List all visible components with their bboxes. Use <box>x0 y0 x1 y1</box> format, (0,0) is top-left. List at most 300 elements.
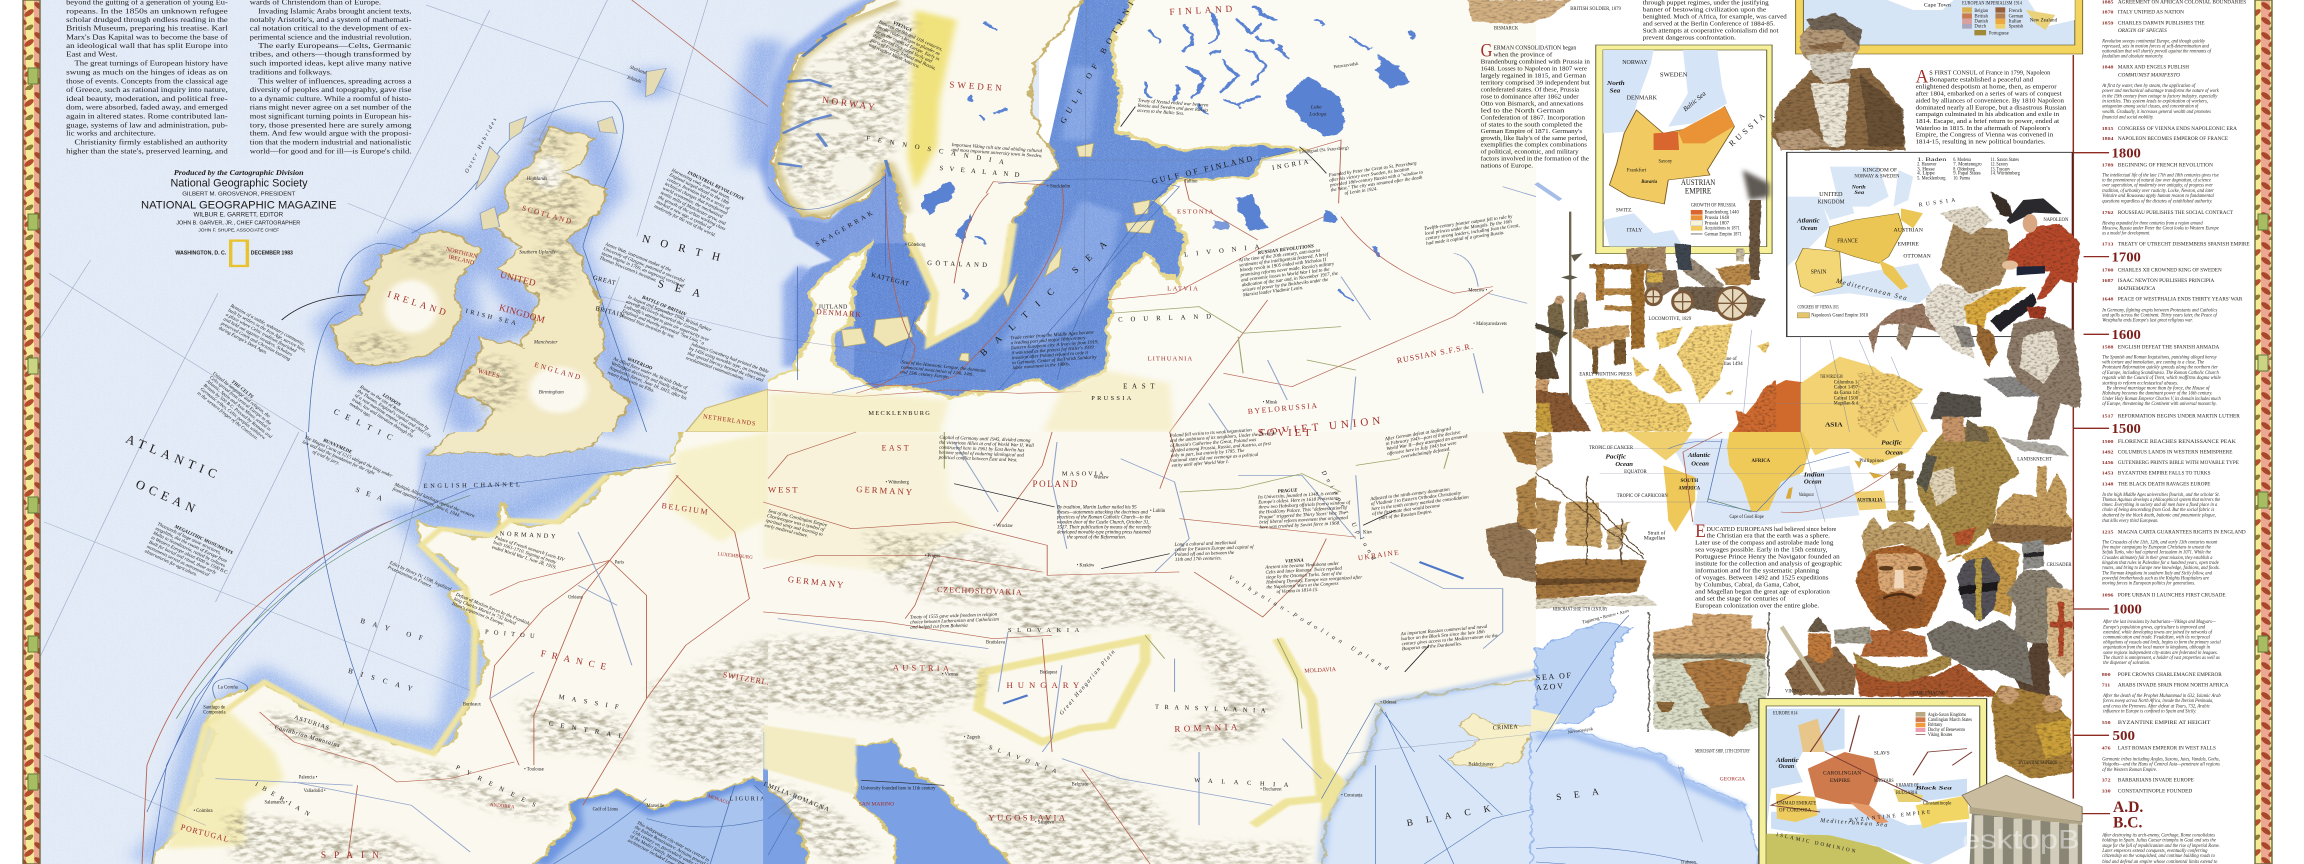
callouts in Atlantic and France: RUNNYMEDE <box>322 438 353 456</box>
callouts in central and eastern Europe: here was crushed by Soviet force in 1968. <box>1259 521 1340 531</box>
text column 1: East and West. <box>66 50 118 59</box>
text column 1: of Greece, such as rational inquiry into nature, <box>66 86 228 94</box>
timeline medieval entries: THE BLACK DEATH RAVAGES EUROPE <box>2118 481 2210 487</box>
prussia inset labels: SWEDEN <box>1660 71 1688 78</box>
callouts in central and eastern Europe: century gives access to the Mediterranean via the <box>1401 634 1499 647</box>
europe 814 labels and legend: Viking Routes <box>1928 733 1953 738</box>
callouts in Atlantic and France: observatories for agriculture. <box>144 549 198 578</box>
timeline late antique entries: Visigoths—and the Huns of Central Asia—penetrate all regions <box>2102 762 2220 767</box>
visored knight <box>1927 557 2033 687</box>
callouts in British Isles seas: Napoleon's forces, June 18, 1815, after his <box>607 366 687 402</box>
timeline early medieval entries: BYZANTINE EMPIRE AT HEIGHT <box>2118 719 2211 726</box>
map labels central and eastern Europe: • Lublin <box>1150 509 1166 514</box>
callouts in British Isles seas: Germanic tribes, Celtic peoples withdrew <box>199 387 266 442</box>
map labels France and Iberia: Cantabrian Mountains <box>274 725 341 749</box>
vienna inset labels: Ocean <box>1800 224 1818 232</box>
text column 2: to a dynamic culture. While a roomful of histo- <box>250 95 411 103</box>
Norwegian fjords <box>778 23 890 177</box>
vienna inset labels: 13. Tuscany <box>1991 167 2010 172</box>
text column 1: The great turnings of European history have <box>74 59 228 68</box>
callouts in Scandinavia and Baltic: and reached North America. <box>868 43 920 70</box>
callouts in Scandinavia and Baltic: invasion after Poland refused to cede it <box>1012 351 1089 361</box>
world map 1500 upper: Europe and Asia: Cabot 1497 <box>1834 385 1858 390</box>
printing press and table <box>1536 264 1648 373</box>
callouts in central and eastern Europe: center for Eastern Europe and capital of <box>1175 545 1254 553</box>
map labels central and eastern Europe: Great Hungarian Plain <box>1059 648 1117 717</box>
timeline entries 17th century: 1700 <box>2102 269 2114 273</box>
map labels central and eastern Europe: • Zagreb <box>964 736 981 741</box>
callouts in British Isles seas: United by language and religion, the <box>211 372 271 420</box>
Dobruja yellow coast <box>1321 759 1346 822</box>
map labels central and eastern Europe: • Odessa <box>1380 701 1396 706</box>
Netherlands coast <box>686 389 768 432</box>
europe 814 labels and legend: Black Sea <box>1914 785 1952 791</box>
map labels central and eastern Europe: SAN MARINO <box>859 801 894 807</box>
callouts in British Isles seas: by 1456 using movable type, an invention <box>688 347 766 379</box>
Crimea <box>1449 715 1542 767</box>
vienna inset labels: Atlantic <box>1796 217 1820 224</box>
imperial legend swatches: Spanish <box>2009 24 2023 29</box>
text column 2: tory, those presented here are surely among <box>250 121 412 130</box>
imperial legend swatches: Belgian <box>1974 9 1988 14</box>
timeline upper entries: COMMUNIST MANIFESTO <box>2118 72 2180 78</box>
vienna inset seas <box>1788 167 1933 303</box>
callouts in Atlantic and France: in Western Europe about 4500 to 1500 B.C. <box>150 536 229 576</box>
quadrant: Atlantic, France and Iberia <box>39 419 803 864</box>
map labels Scandinavia: FENNOSCANDIA <box>866 135 1012 168</box>
timeline marker 1600 <box>2084 326 2141 342</box>
timeline early medieval entries <box>2102 619 2229 726</box>
timeline early medieval entries: and cross the Pyrenees. After defeat at Tours, 732, Arabic <box>2103 703 2210 709</box>
text block: Age of exploration: DUCATED EUROPEANS had believed since before <box>1706 525 1836 533</box>
Sea speckle <box>768 0 1258 400</box>
text column 1: ideal beauty, moderation, and political free- <box>66 95 228 103</box>
map labels British Isles: Manchester <box>533 340 557 345</box>
wheel spokes <box>1645 287 1749 319</box>
southern England <box>426 432 603 458</box>
europe 814 labels and legend: Atlantic <box>1775 756 1799 764</box>
coastal yellow tint France and Iberia <box>176 475 607 832</box>
inland white in Ireland and England <box>384 157 588 413</box>
callouts in British Isles seas: modern age. <box>348 402 371 419</box>
timeline early medieval entries: 550 <box>2102 722 2111 726</box>
map labels Scandinavia: Tallinn <box>1184 180 1198 185</box>
timeline entries 18th century: Having expanded for three centuries from a region around <box>2101 221 2203 226</box>
europe 814 seas <box>1767 709 1967 864</box>
world map 1500 lower: Pacific <box>1881 439 1902 446</box>
world map 1500 upper: Europe and Asia: EUROPE <box>1746 418 1763 426</box>
callouts in central and eastern Europe: An important Russian commercial and naval <box>1400 625 1488 637</box>
callouts in British Isles seas: return from exile on Elba. <box>606 371 655 394</box>
illustration: Karl Marx <box>1771 13 1906 150</box>
world map 1500 upper: Europe and Asia <box>1585 330 1928 432</box>
callouts in central and eastern Europe: only in part, but entirely by 1795. The <box>1171 449 1245 459</box>
map labels central and eastern Europe: ROMANIA <box>1174 722 1241 734</box>
timeline late antique entries: LAST ROMAN EMPEROR IN WEST FALLS <box>2118 745 2216 751</box>
callouts in central and eastern Europe: wooden door of the Castle Church, October 31, <box>1057 521 1149 526</box>
map labels France and Iberia: NORMANDY <box>499 530 558 540</box>
map labels central and eastern Europe: EAST <box>882 443 911 452</box>
callouts in British Isles seas: century. Invention led to a series of <box>666 177 730 212</box>
imperial legend swatches <box>1962 7 2023 36</box>
timeline entries 16th century <box>2101 344 2240 419</box>
map labels British Isles: WALES <box>477 368 501 380</box>
callouts in central and eastern Europe: theses—statements attacking the doctrines and <box>1057 511 1148 516</box>
text block: Age of exploration: institute for the collection and analysis of geographic <box>1695 560 1842 567</box>
callouts in Scandinavia and Baltic: and most important university town in Sweden. <box>951 148 1043 159</box>
callouts in British Isles seas: built by settlers in the Iron Age, survive here, <box>227 308 307 354</box>
timeline medieval entries: 1492 <box>2102 451 2114 455</box>
map labels central and eastern Europe: • Wrocław <box>993 524 1014 529</box>
callouts in Scandinavia and Baltic: At the time of the 20th century, anti-tsarist <box>1237 249 1321 264</box>
timeline medieval entries: FLORENCE REACHES RENAISSANCE PEAK <box>2118 438 2237 445</box>
europe 814 labels and legend: BYZANTINE EMPIRE <box>1849 809 1933 824</box>
mainland, Finland and Russia land <box>748 0 1571 447</box>
callouts in British Isles seas: Luftwaffe's attempt to gain air superiority over <box>622 304 710 343</box>
europe 814 labels and legend: Brittany <box>1928 723 1943 728</box>
vienna inset labels: 11. Saxon States <box>1991 158 2019 163</box>
text block: Age of exploration: information and for the systematic planning <box>1695 567 1820 574</box>
vienna inset labels: 3. Hesse <box>1917 167 1935 172</box>
map labels France and Iberia: Valladolid • <box>304 789 326 794</box>
text column 2: diversity of peoples and topography, gave rise <box>250 86 411 94</box>
prussia inset seas <box>1603 50 1727 247</box>
prussia inset legend: Prussia 1648 <box>1704 216 1729 221</box>
timeline entries 16th century: with torture and immolation, are coming to a close. The <box>2102 360 2204 365</box>
timeline Roman entry: After destroying its arch-enemy, Carthage, Rome consolidates <box>2101 833 2215 838</box>
timeline entries 17th century: In Germany, fighting erupts between Protestants and Catholics <box>2101 307 2218 313</box>
text block: Africa colonialism: benighted. Much of Africa, for example, was carved <box>1643 13 1787 20</box>
world map 1500 lower: AFRICA <box>1752 457 1771 464</box>
map labels central and eastern Europe: EMILIA-ROMAGNA <box>762 781 831 814</box>
Sea of Azov <box>1536 622 1629 725</box>
callouts in British Isles seas: Atlantic, Spain and Asia Minor, settled in <box>204 379 272 433</box>
text block: Africa colonialism: and served at the Berlin Conference of 1884-85. <box>1643 20 1775 27</box>
islands <box>475 68 666 230</box>
callouts in central and eastern Europe: brief liberal reform movement that originated <box>1259 516 1349 526</box>
callouts in central and eastern Europe: World War II—they attempted an armored <box>1386 434 1468 452</box>
timeline medieval entries: The Norman kingdoms in southern Italy and Sicily follow, and <box>2102 570 2212 576</box>
vienna inset labels: AUSTRIAN <box>1894 227 1923 233</box>
vienna inset Spain <box>1796 248 1842 293</box>
timeline medieval entries: 1500 <box>2102 441 2114 445</box>
europe 814 labels and legend: Constantinople <box>1923 801 1952 806</box>
Asia edge of world map <box>1858 372 1923 438</box>
vienna inset labels: 10. Parma <box>1953 176 1970 181</box>
map labels central and eastern Europe: • Bucharest <box>1260 787 1282 792</box>
timeline entries 17th century: Westphalia ends Europe's last great religious war. <box>2102 318 2193 323</box>
callouts in central and eastern Europe: spiritual unity and learning to <box>765 519 824 538</box>
text block: Age of exploration: sea voyages possible. Early in the 15th century, <box>1695 546 1827 553</box>
Russian river fragment <box>1536 183 1560 200</box>
prussia inset legend <box>1691 203 1742 237</box>
text column 2: Invading Islamic Arabs brought ancient texts, <box>258 7 411 16</box>
map labels Scandinavia: INGRIA <box>1272 158 1312 172</box>
callouts in central and eastern Europe: the Hradčany Palace. This "defenestration of <box>1259 506 1348 516</box>
world map 1500 lower: Madagascar <box>1799 493 1814 498</box>
callouts in British Isles seas: to the western fringes of the Continent. <box>196 391 259 442</box>
English Channel halo <box>416 445 676 520</box>
map routes and grid <box>39 432 768 864</box>
illustration: Roman temple <box>1962 775 2082 864</box>
merchant ship masts at Ukraine edge <box>1486 432 1536 582</box>
map labels central and eastern Europe: GERMANY <box>856 484 914 497</box>
map labels France and Iberia: SEA <box>354 486 390 505</box>
callouts in central and eastern Europe: Prague" triggered the Thirty Years' War. The <box>1258 511 1347 521</box>
timeline medieval entries: chain of being descending from God. But the social fabric is <box>2102 507 2215 513</box>
map labels Scandinavia <box>814 0 1507 440</box>
cross finial and crown <box>1862 463 1942 562</box>
rider hat <box>2007 198 2062 224</box>
map labels Scandinavia: LITHUANIA <box>1148 356 1193 363</box>
timeline early medieval entries: 711 <box>2102 684 2111 688</box>
map labels Scandinavia: EAST <box>1123 382 1159 390</box>
left decorative border <box>23 0 40 864</box>
map labels France and Iberia: MASSIF <box>558 694 626 712</box>
Portugal yellow tint <box>167 699 284 849</box>
soldier portrait fragment: BRITISH SOLDIER, 1879 <box>1570 7 1622 12</box>
timeline entries 16th century: ENGLISH DEFEAT THE SPANISH ARMADA <box>2118 344 2220 350</box>
callouts in central and eastern Europe: Bosporus and the Dardanelles. <box>1402 642 1462 652</box>
map labels Scandinavia: • Stockholm <box>1047 184 1071 189</box>
timeline late antique entries: of the Western Roman Empire. <box>2102 767 2157 773</box>
vienna inset labels: 5. Mecklenburg <box>1917 176 1946 181</box>
text block: German consolidation: confederated states. Of these, Prussia <box>1481 86 1579 93</box>
map labels France and Iberia: FRANCE <box>540 649 613 674</box>
castle on crag <box>1987 437 2073 545</box>
figure captions: VIKING <box>1785 690 1802 695</box>
europe 814 labels and legend: MAGYARS <box>1874 778 1894 784</box>
Black Sea routes and labels <box>1536 609 1746 864</box>
map labels Scandinavia: JUTLAND <box>818 304 848 310</box>
map labels central and eastern Europe: • Sarajevo <box>1035 821 1055 826</box>
map labels France and Iberia: • Coimbra <box>193 809 213 814</box>
timeline marker 500 <box>2073 727 2135 743</box>
prussia inset German Empire <box>1609 107 1734 204</box>
callouts in Scandinavia and Baltic: had made it capital of a growing Russia. <box>1426 231 1505 247</box>
callouts in British Isles seas <box>195 164 770 452</box>
timeline early medieval entries: After the death of the Prophet Muhammad in 632, Islamic Arab <box>2102 693 2221 699</box>
text block: German consolidation: G <box>1481 41 1492 61</box>
map labels central and eastern Europe: SOVIET <box>1258 428 1314 439</box>
timeline upper entries: MARX AND ENGELS PUBLISH <box>2118 64 2189 70</box>
publisher credits: DECEMBER 1983 <box>251 250 293 256</box>
publisher credits <box>141 169 336 256</box>
text block: Age of exploration: E <box>1695 521 1706 542</box>
quadrant: top right illustrations and timeline <box>1467 0 2250 436</box>
text block: Napoleon <box>1916 66 2067 145</box>
text block: German consolidation: largely regained in 1815, and German <box>1481 72 1587 79</box>
text block: Napoleon: after 1804, embarked on a series of wars of conquest <box>1916 90 2062 97</box>
Benelux and eastern France tint <box>666 432 768 542</box>
timeline medieval entries: 1215 <box>2102 531 2114 535</box>
callouts in British Isles seas: trade, law and literature through the <box>351 398 415 440</box>
callouts in Scandinavia and Baltic: the West." The city was renamed after the death <box>1330 176 1423 193</box>
text block: Napoleon: 1814-15, resulting in new political boundaries. <box>1916 138 2045 145</box>
text block: German consolidation: of political, economic, and military <box>1481 148 1579 155</box>
callouts in central and eastern Europe: Seat of the Carolingian Empire <box>768 509 828 529</box>
timeline entries 18th century: questions regardless of the dictates of established authority. <box>2102 198 2212 204</box>
map labels France and Iberia: La Coruña <box>218 686 238 691</box>
timeline early medieval entries: the dispenser of salvation. <box>2103 660 2150 666</box>
text block: Napoleon: Empire, the Congress of Vienna was convened in <box>1916 131 2054 138</box>
timeline Roman entry: holdings in Spain. Julius Caesar triumphs in Gaul and sets the <box>2102 838 2216 843</box>
illustration group: Charlemagne, knights, soldier, Viking (true scale) <box>1782 427 2073 697</box>
timeline medieval entries: kingdom that rules in Palestine for a hundred years, open trade <box>2102 560 2219 566</box>
timeline entries 18th century: Voltaire and Rousseau apply human reason to fundamental <box>2102 193 2214 199</box>
press and locomotive captions: LOCOMOTIVE, 1829 <box>1649 317 1692 322</box>
map labels central and eastern Europe <box>762 428 1519 829</box>
timeline upper entries: 1815 <box>2102 128 2114 132</box>
timeline medieval entries: BYZANTINE EMPIRE FALLS TO TURKS <box>2118 470 2210 476</box>
Ireland <box>333 232 479 364</box>
world map 1500 upper: Europe and Asia: ASIA <box>1825 421 1843 428</box>
map labels France and Iberia: PYRENEES <box>455 764 544 813</box>
callouts in British Isles seas: technical changes that transformed <box>664 182 728 217</box>
text block: German consolidation: Otto von Bismarck, and annexations <box>1481 100 1584 107</box>
europe 814 labels and legend: Ocean <box>1778 762 1794 770</box>
horse forelegs <box>1868 303 1938 354</box>
timeline upper entries: 1804 <box>2102 138 2114 142</box>
map labels France and Iberia: SPAIN <box>321 851 387 861</box>
timeline marker 1600: 1600 <box>2112 326 2141 342</box>
timeline Roman entry: Later emperors extend conquests, eventually conferring <box>2101 848 2208 854</box>
prussia inset labels: Bavaria <box>1641 178 1657 185</box>
Scandinavian peninsula <box>773 0 1091 343</box>
vienna inset labels: KINGDOM OF <box>1863 168 1897 173</box>
world map 1500 upper: Europe and Asia: Columbus 1492-93 <box>1834 380 1871 385</box>
world map 1500 lower: Ocean <box>1691 460 1709 467</box>
map labels central and eastern Europe: Dnieper Upland <box>1319 469 1379 565</box>
world map 1500 lower: Magellan <box>1644 536 1665 541</box>
callouts in British Isles seas: marked a new age, a symbol of <box>655 200 712 231</box>
callouts in British Isles seas: steam engine in 1769, an improved version of <box>600 251 685 290</box>
press and locomotive captions: EARLY PRINTING PRESS <box>1579 372 1632 377</box>
sea speckle <box>39 432 768 864</box>
text column 2: tribes, and others—though transformed by <box>250 50 412 59</box>
vienna inset labels <box>1796 158 2020 318</box>
timeline upper entries: in textiles. This system leads to exploitation of workers, <box>2102 98 2208 104</box>
map labels central and eastern Europe: University founded here in 11th century <box>861 786 936 791</box>
timeline entries 18th century: 1789 <box>2102 164 2114 168</box>
soldier with hat below horse <box>1930 392 1990 442</box>
text block: Age of exploration: European colonization over the entire globe. <box>1695 602 1819 609</box>
Eastern Crimea fragment <box>1531 709 1560 732</box>
map labels British Isles: UNITED <box>499 271 537 289</box>
timeline medieval entries: shattered by the black death, bubonic and pneumonic plague, <box>2102 513 2216 518</box>
callouts in central and eastern Europe: choice between Lutheranism and Catholicism <box>910 618 999 626</box>
timeline marker 1000: 1000 <box>2112 601 2142 617</box>
prussia inset labels: Baltic Sea <box>1682 90 1708 113</box>
timeline late antique entries: 372 <box>2102 779 2111 783</box>
europe 814 labels and legend: SLAVS <box>1874 750 1890 756</box>
callouts in central and eastern Europe: constructed here in 1961 by East Berlin has <box>939 446 1024 454</box>
world map 1500 lower: AMERICA <box>1679 485 1701 491</box>
timeline entries 16th century: 1517 <box>2102 415 2114 419</box>
lower right insets and temple <box>1759 685 2082 864</box>
publisher credits: WASHINGTON, D. C. <box>175 250 226 256</box>
world map 1500 upper: Europe and Asia: Cabral 1500 <box>1834 396 1858 401</box>
prussia inset orange acquisitions <box>1678 107 1734 143</box>
callouts in Scandinavia and Baltic: Treaty of Nystad ended war between <box>1138 99 1209 109</box>
europe 814 labels and legend: UMMAD EMIRATE <box>1777 801 1816 806</box>
callouts in British Isles seas: world economies; the mechanized <box>662 186 724 220</box>
Baltic Sea <box>871 0 1307 400</box>
callouts in central and eastern Europe <box>764 424 1499 652</box>
timeline early medieval entries: influence in Europe is confined to Spain and Sicily. <box>2103 708 2196 714</box>
map labels Scandinavia: NORWAY <box>821 96 878 113</box>
timeline medieval entries: Thomas Aquinas develops a philosophical system that mirrors the <box>2102 498 2221 503</box>
map labels France and Iberia: Orléans <box>568 596 583 601</box>
map labels France and Iberia: MONACO <box>707 794 730 807</box>
text block: Age of exploration: the Christian era that the earth was a sphere. <box>1706 532 1830 539</box>
map labels France and Iberia: BELGIUM <box>661 501 710 517</box>
europe 814 labels and legend: KHANATE OF <box>1896 783 1919 788</box>
text block: German consolidation: exemplifies the complex combinations <box>1481 141 1587 148</box>
callouts in Atlantic and France: ended World War I, June 28, 1919. <box>491 545 557 571</box>
text block: Age of exploration <box>1695 521 1842 609</box>
timeline early medieval entries: extended, while developing towns are joined by networks of <box>2103 629 2213 635</box>
text block: Napoleon: A <box>1916 66 1928 87</box>
map labels British Isles: Islands <box>625 75 642 85</box>
text column 1: British Museum, preparing his treatise. Karl <box>66 24 228 33</box>
text column 1 <box>66 0 228 156</box>
callouts in Scandinavia and Baltic: VIKINGS <box>892 21 913 34</box>
map labels Scandinavia: LATVIA <box>1167 286 1199 293</box>
callouts in central and eastern Europe: the victorious Allies at end of World War II, Wall <box>939 441 1035 449</box>
rider sleeve and hand <box>2002 260 2045 275</box>
callouts in central and eastern Europe: Poland fell victim to its weak organization <box>1168 428 1253 439</box>
Great Britain <box>453 127 629 447</box>
vienna inset Italy and Poland <box>1879 208 1923 290</box>
callouts in central and eastern Europe: part of the Russian Empire. <box>1378 510 1433 521</box>
map labels Scandinavia: Petrozavodsk <box>1333 62 1359 70</box>
text column 1: an ideological wall that has split Europe into <box>66 42 228 50</box>
timeline marker 1700 <box>2084 249 2141 264</box>
timeline upper entries: 1859 <box>2102 22 2114 26</box>
callouts in Scandinavia and Baltic: Important Viking cult site and abiding cultural <box>951 143 1043 154</box>
timeline upper entries: ITALY UNIFIED AS NATION <box>2118 9 2184 15</box>
vienna inset labels: Napoleon's Grand Empire 1810 <box>1811 313 1868 318</box>
Viking warrior <box>1785 617 1872 695</box>
callouts in British Isles seas: England surged ahead in the 18th <box>667 173 730 207</box>
callouts in Scandinavia and Baltic: provided 18th-century Russia with a "window to <box>1329 170 1424 189</box>
world map 1500 lower <box>1589 432 1923 541</box>
quadrant: lower right illustrations and timeline <box>1531 432 2246 864</box>
map labels British Isles: SEA <box>657 278 713 303</box>
map labels France and Iberia: POITOU <box>485 629 540 640</box>
world map 1500 lower: Pacific <box>1606 453 1626 460</box>
text column 2: them. And few would argue with the proposi- <box>250 129 411 138</box>
vienna inset labels: 7. Montenegro <box>1953 162 1982 167</box>
prussia inset legend: Acquisitions to 1871 <box>1704 226 1740 231</box>
vienna inset labels: 9. Papal States <box>1953 171 1981 176</box>
renaissance soldier <box>1917 427 2020 557</box>
prussia inset legend: GROWTH OF PRUSSIA <box>1691 203 1736 208</box>
timeline entries 18th century: to the preeminence of natural law over dogmatism, of science <box>2102 178 2211 183</box>
map labels British Isles: Shetland <box>629 66 647 76</box>
inset: Congress of Vienna 1815 <box>1787 152 2072 337</box>
horse head <box>1940 207 1993 235</box>
vienna inset labels: FRANCE <box>1837 237 1858 244</box>
map labels Scandinavia: FINLAND <box>1169 5 1236 18</box>
imperial legend swatches: Danish <box>1974 19 1988 24</box>
map labels Scandinavia: ESTONIA <box>1177 208 1215 215</box>
map labels France and Iberia: ASTURIAS <box>293 715 331 732</box>
callouts in Scandinavia and Baltic: access to the Baltic Sea. <box>1137 109 1184 117</box>
map labels Scandinavia: Leningrad (St. Petersburg) <box>1299 146 1349 155</box>
prussia inset labels: EMPIRE <box>1685 187 1711 196</box>
